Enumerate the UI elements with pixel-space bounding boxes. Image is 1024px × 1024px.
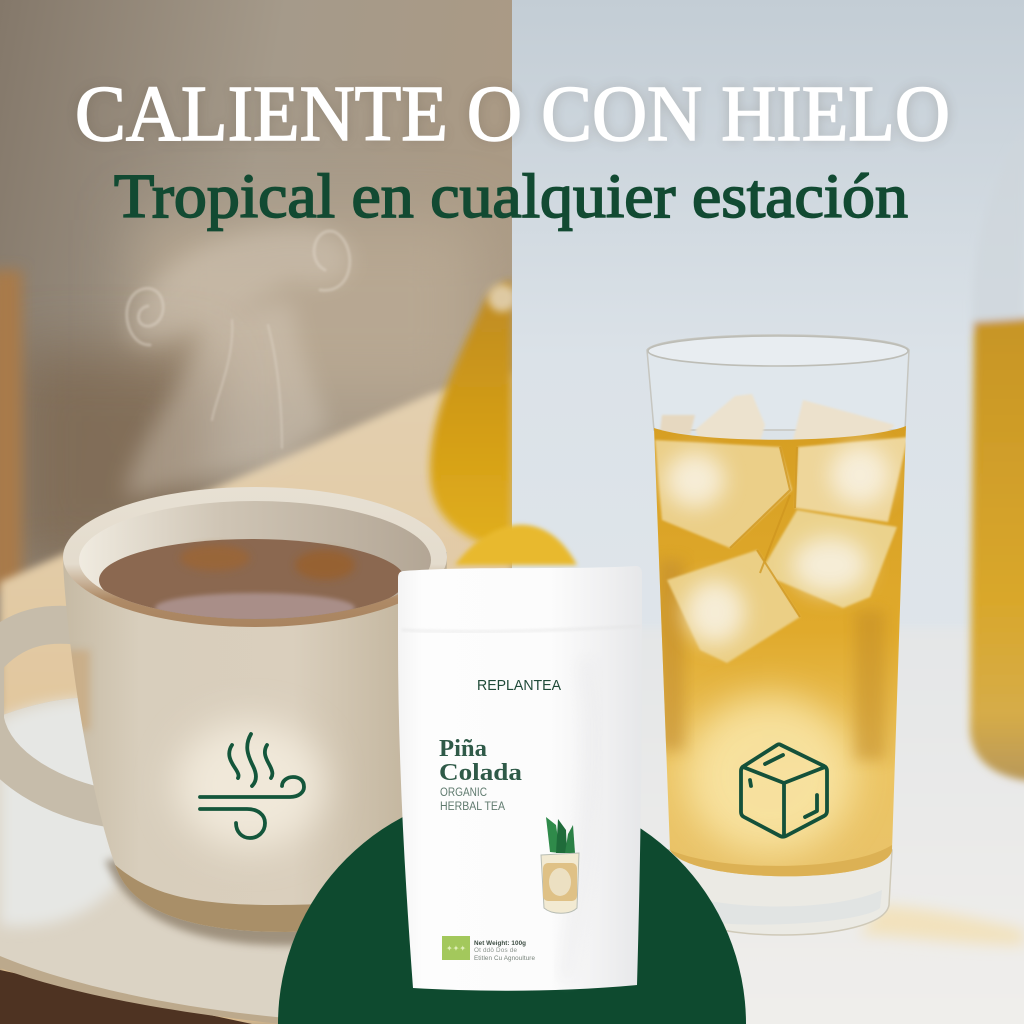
product type: HERBAL TEA <box>440 801 505 813</box>
product name: Piña <box>439 736 487 762</box>
organic logo: ✦✦✦ <box>446 944 466 953</box>
iced tea <box>654 426 906 876</box>
bottle blurred right <box>964 310 1024 786</box>
title: CALIENTE O CON HIELO <box>75 71 950 158</box>
product type: ORGANIC <box>440 787 487 799</box>
lemon behind <box>455 525 577 565</box>
panel: hot side background <box>0 0 516 1024</box>
glass body <box>647 335 909 430</box>
glass base <box>668 850 892 935</box>
pouch creases <box>402 626 640 980</box>
saucer <box>0 697 310 1024</box>
net weight text: Etitlen Cu Agnoulture <box>474 955 535 962</box>
title: CALIENTE O CON HIELO <box>75 71 950 158</box>
subtitle: Tropical en cualquier estación <box>114 163 908 231</box>
pouch body <box>398 566 642 991</box>
product name <box>439 736 522 786</box>
panel: iced side background <box>500 0 1024 1024</box>
panel: product pouch <box>398 566 642 991</box>
mug rim <box>63 487 447 627</box>
net weight text: Ot ddö Dos de <box>474 947 517 954</box>
icon: ice cube <box>741 744 827 837</box>
mug <box>0 487 447 940</box>
product name: Colada <box>439 760 522 786</box>
organic logo <box>442 936 470 960</box>
mug handle <box>0 625 108 808</box>
net weight text: Net Weight: 100g <box>474 940 526 947</box>
ice cubes <box>655 437 908 663</box>
green semicircle <box>278 790 746 1024</box>
drink illustration <box>541 817 579 913</box>
panel: iced tea glass <box>640 335 920 935</box>
meniscus ice <box>660 394 895 442</box>
mug icon glow and shading <box>71 648 336 932</box>
steam <box>125 227 352 498</box>
mug body <box>63 552 447 932</box>
product type <box>440 787 505 813</box>
icon: steam and wind <box>200 734 304 838</box>
tea surface <box>99 539 405 623</box>
net weight text <box>474 940 535 962</box>
brand name: REPLANTEA <box>477 678 561 694</box>
